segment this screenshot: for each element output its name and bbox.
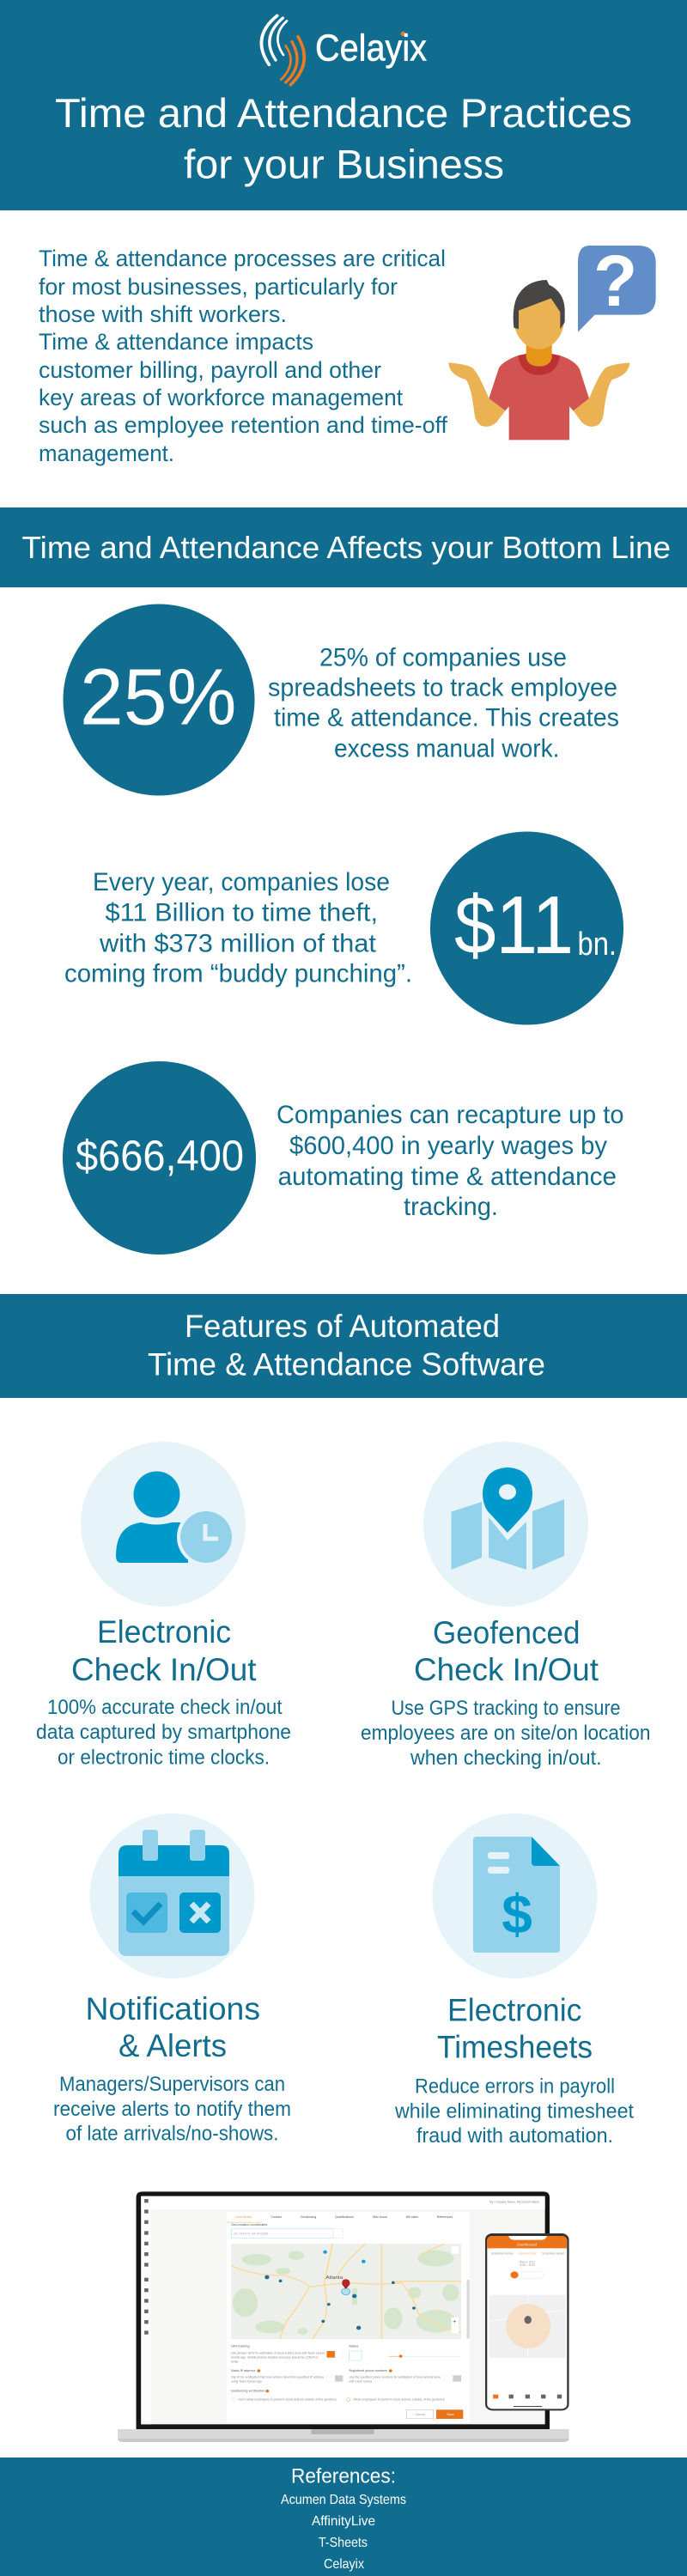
section banner: features: Time & Attendance Software: [148, 1346, 545, 1382]
section banner: features: [0, 1294, 687, 1398]
feature heading: & Alerts: [119, 2028, 227, 2063]
feature description: receive alerts to notify them: [53, 2098, 291, 2121]
stat text: time theft: $11 Billion to time theft,: [105, 898, 378, 927]
phone: May 4, 2021: [520, 2261, 535, 2264]
header panel: [0, 0, 687, 210]
stat text: time theft: [64, 868, 412, 987]
feature heading: Check In/Out: [71, 1652, 257, 1687]
stat: $666,400: $666,400: [76, 1132, 244, 1180]
intro text block: key areas of workforce management: [39, 385, 403, 410]
icon: confused person with question bubble: [448, 240, 656, 440]
feature heading: Timesheets: [437, 2030, 593, 2064]
laptop: Registered phone numbers: [350, 2369, 387, 2372]
stat: $11bn: $11: [454, 879, 574, 971]
logo: Celayix: Celayix: [315, 27, 427, 69]
feature heading: Electronic: [447, 1992, 582, 2028]
phone: 9:00 - 5:00: [520, 2263, 535, 2267]
section banner: features: Features of Automated: [185, 1309, 500, 1344]
feature heading: Electronic: [97, 1614, 231, 1649]
laptop: Use IP for verification that clock actions done from specified IP address: [231, 2376, 324, 2379]
stat text: recapture wages: tracking.: [404, 1193, 498, 1221]
stat: 25%: [64, 605, 619, 795]
intro text block: customer billing, payroll and other: [39, 357, 381, 383]
stat text: spreadsheets: spreadsheets to track employee: [268, 673, 617, 702]
feature description: when checking in/out.: [410, 1747, 601, 1770]
laptop: Save: [447, 2413, 454, 2416]
feature description: while eliminating timesheet: [394, 2100, 634, 2123]
feature heading: Check In/Out: [414, 1652, 599, 1687]
laptop: Contact: [271, 2215, 283, 2219]
stat text: time theft: coming from “buddy punching”.: [64, 960, 412, 987]
map: Atlanta: [325, 2275, 343, 2281]
feature heading: Geofenced: [433, 1615, 581, 1650]
laptop: General info: [235, 2215, 252, 2219]
laptop: Bill rates: [406, 2215, 418, 2219]
title: Time and Attendance Practices: [55, 91, 632, 137]
stat text: recapture wages: automating time & attendance: [278, 1163, 617, 1191]
feature: electronic check in/out: [36, 1442, 291, 1769]
laptop: GPS tracking: [231, 2345, 250, 2348]
laptop: Use phones' GPS for verification of clock actions done with Team Xpress: [231, 2352, 325, 2354]
laptop: Radius: [350, 2345, 358, 2348]
intro text block: management.: [39, 440, 174, 466]
feature heading: [71, 1614, 257, 1687]
laptop: using Team Xpress app.: [231, 2380, 263, 2384]
section banner: bottom line: [0, 507, 687, 587]
icon: confused person with question bubble: ?: [593, 240, 637, 321]
laptop: with Clock Xpress.: [350, 2380, 373, 2384]
feature description: Reduce errors in payroll: [415, 2075, 615, 2099]
footer: references: References:: [291, 2464, 396, 2488]
feature heading: [437, 1992, 593, 2064]
intro text block: [39, 246, 447, 466]
feature description: [394, 2075, 634, 2148]
feature description: or electronic time clocks.: [58, 1747, 270, 1769]
laptop: Geofencing: [301, 2215, 316, 2219]
feature description: of late arrivals/no-shows.: [65, 2123, 278, 2145]
feature description: Use GPS tracking to ensure: [392, 1697, 620, 1720]
feature: geofenced check in/out: [361, 1442, 651, 1770]
stat text: recapture wages: $600,400 in yearly wages by: [289, 1132, 607, 1160]
stat text: spreadsheets: 25% of companies use: [319, 644, 567, 671]
laptop: Qualifications: [335, 2215, 354, 2219]
reference list: [281, 2493, 406, 2572]
product screenshot: laptop and phone: [118, 2191, 569, 2442]
stat: $11bn: bn.: [577, 927, 617, 963]
phone: Expected start: [519, 2252, 536, 2255]
reference list: T-Sheets: [319, 2536, 368, 2550]
feature heading: Notifications: [86, 1991, 260, 2026]
icon: calendar: [119, 1830, 229, 1956]
laptop: Use the specified phone numbers for verification of clock actions done: [350, 2376, 441, 2379]
icon: map with pin: [452, 1467, 564, 1570]
laptop: Cancel: [415, 2413, 426, 2416]
stat text: recapture wages: Companies can recapture up to: [277, 1101, 623, 1129]
laptop: mobile app. Mobile phones location accuracy should be 1250 ft or: [231, 2356, 319, 2359]
map: +: [453, 2318, 457, 2324]
intro text block: Time & attendance impacts: [39, 329, 313, 355]
laptop: Geo-location coordinates: [231, 2222, 267, 2227]
stat text: spreadsheets: time & attendance. This creates: [274, 704, 619, 732]
reference list: Acumen Data Systems: [281, 2493, 406, 2507]
laptop: Geofencing verification: [231, 2390, 264, 2393]
intro text block: such as employee retention and time-off: [39, 412, 447, 438]
icon: timesheet document: [473, 1837, 560, 1953]
icon: person with clock: [116, 1472, 235, 1566]
phone: Dashboard: [517, 2243, 537, 2248]
stat text: recapture wages: [277, 1101, 623, 1221]
title: [55, 91, 632, 187]
map: [231, 2244, 461, 2339]
laptop: Static IP address: [231, 2369, 255, 2372]
laptop: [118, 2191, 569, 2442]
phone: [485, 2233, 569, 2410]
icon: timesheet document: $: [502, 1883, 532, 1945]
laptop: Allow employees to perform clock actions outside of the geofence: [354, 2398, 445, 2402]
intro text block: Time & attendance processes are critical: [39, 246, 446, 271]
stat text: spreadsheets: excess manual work.: [334, 735, 560, 762]
intro text block: those with shift workers.: [39, 301, 287, 327]
phone: Scheduled arrival: [491, 2252, 514, 2255]
laptop: My Company Name, My Branch Name: [489, 2200, 540, 2204]
stat text: time theft: with $373 million of that: [99, 929, 377, 958]
feature: notifications and alerts: [53, 1814, 291, 2145]
feature description: employees are on site/on location: [361, 1722, 651, 1745]
stat text: time theft: Every year, companies lose: [93, 868, 390, 896]
feature description: 100% accurate check in/out: [47, 1696, 283, 1719]
laptop: Don't allow employees to perform clock actions outside of the geofence: [239, 2398, 337, 2402]
feature description: data captured by smartphone: [36, 1721, 291, 1744]
feature: electronic timesheets: [394, 1814, 634, 2148]
feature heading: [414, 1615, 599, 1687]
laptop: References: [437, 2215, 453, 2219]
feature description: [361, 1697, 651, 1770]
title: for your Business: [184, 143, 504, 187]
reference list: Celayix: [324, 2557, 364, 2572]
phone: Scheduled depart: [542, 2252, 564, 2255]
stat: 25%: 25%: [80, 653, 237, 742]
laptop: Max hours: [373, 2215, 387, 2219]
intro text block: for most businesses, particularly for: [39, 274, 398, 300]
feature description: Managers/Supervisors can: [59, 2073, 285, 2096]
stat text: spreadsheets: [268, 644, 619, 762]
section banner: bottom line: Time and Attendance Affects your Bottom Line: [22, 530, 671, 565]
laptop: 33.739473,-84.379265: [234, 2232, 269, 2236]
logo: Celayix: [261, 15, 427, 85]
feature description: fraud with automation.: [416, 2124, 613, 2148]
reference list: AffinityLive: [312, 2514, 375, 2529]
laptop: better.: [231, 2360, 239, 2363]
stat: $666,400: [63, 1061, 623, 1255]
footer: references: [0, 2458, 687, 2576]
feature description: [36, 1696, 291, 1769]
stat: $11bn: [64, 831, 623, 1025]
feature heading: [86, 1991, 260, 2063]
feature description: [53, 2073, 291, 2145]
